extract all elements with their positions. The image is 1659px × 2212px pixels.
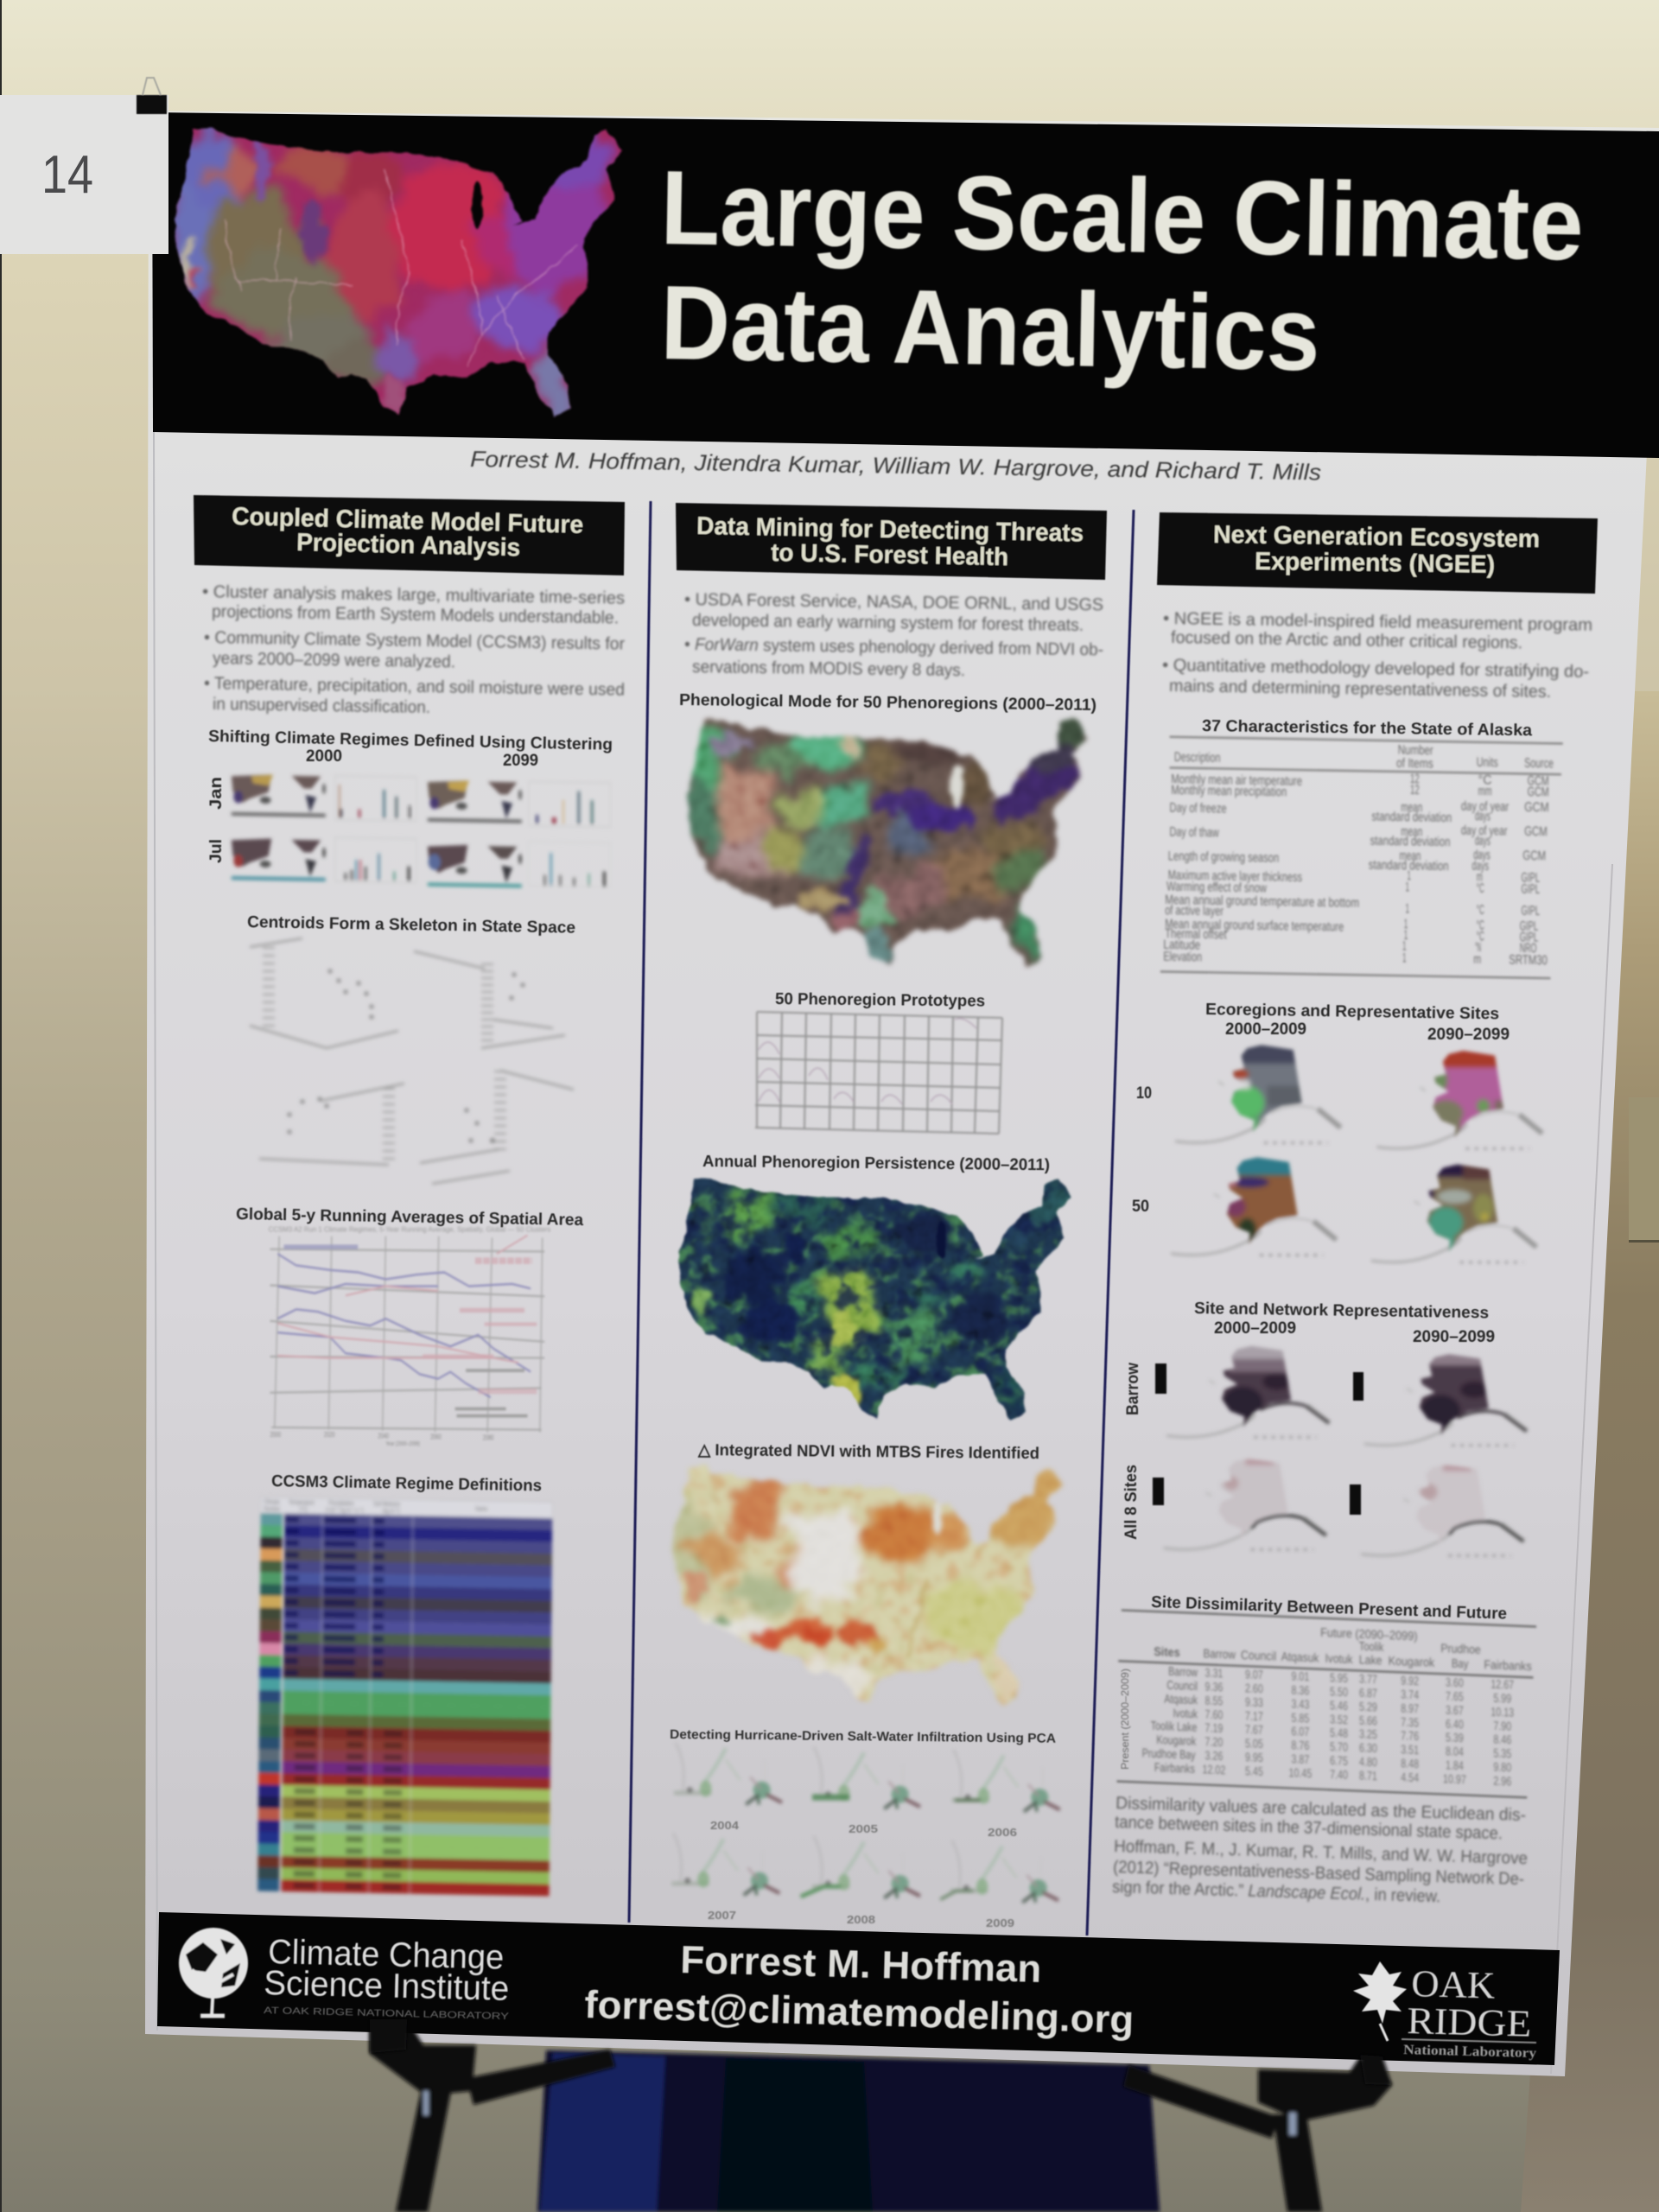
table alaska characteristics: day of year (1461, 823, 1508, 838)
table site dissimilarity: 4.80 (1359, 1755, 1377, 1770)
table alaska characteristics: NRO (1520, 940, 1536, 956)
line chart global running averages: 2000 (270, 1430, 281, 1440)
map phenological mode (679, 709, 1096, 974)
table alaska characteristics: m (1473, 951, 1481, 966)
number card: 14 (41, 145, 93, 205)
table alaska characteristics: 1 (1404, 927, 1408, 942)
bullets column 3: • Quantitative methodology developed for stratifying do- (1162, 656, 1589, 682)
table alaska characteristics: 1 (1406, 900, 1409, 916)
table site dissimilarity: 3.25 (1359, 1727, 1377, 1742)
table site dissimilarity: Council (1241, 1649, 1276, 1663)
notes and citation: (2012) “Representativeness-Based Sampling Network De- (1113, 1858, 1524, 1889)
salt-water infiltration panels: 2008 (847, 1913, 875, 1926)
heading integrated NDVI: △ Integrated NDVI with MTBS Fires Identified (697, 1441, 1039, 1463)
table site dissimilarity: 5.05 (1245, 1737, 1263, 1751)
table alaska characteristics: °C (1478, 772, 1492, 787)
table alaska characteristics: standard deviation (1369, 857, 1449, 874)
table site dissimilarity: 5.29 (1359, 1700, 1377, 1714)
notes and citation: sign for the Arctic.” Landscape Ecol., in review. (1112, 1878, 1440, 1906)
logo: climate change science institute (179, 1928, 510, 2022)
map phenoregion persistence (671, 1170, 1079, 1427)
table alaska characteristics: m (1477, 869, 1483, 884)
shifting climate regimes figure: Jan (207, 777, 226, 810)
ecoregions alaska maps: 2090–2099 (1427, 1026, 1510, 1044)
table site dissimilarity: Bay (1452, 1656, 1469, 1671)
table site dissimilarity: 8.48 (1401, 1757, 1419, 1771)
table alaska characteristics: GIPL (1522, 903, 1540, 918)
prototypes grid (755, 990, 1002, 1134)
table site dissimilarity: Fairbanks (1154, 1761, 1195, 1776)
site and network representativeness (1122, 1300, 1527, 1555)
table site dissimilarity: Kougarok (1389, 1654, 1435, 1669)
bullets column 1: • Cluster analysis makes large, multivariate time-series (202, 582, 625, 608)
table site dissimilarity: 9.01 (1291, 1669, 1309, 1684)
table site dissimilarity: 6.40 (1446, 1717, 1464, 1732)
table alaska characteristics: Number (1398, 742, 1433, 758)
table alaska characteristics: SRTM30 (1509, 952, 1548, 968)
table alaska characteristics: of Items (1396, 755, 1433, 771)
table site dissimilarity: 7.40 (1330, 1768, 1348, 1782)
heading phenological mode: Phenological Mode for 50 Phenoregions (2000–2011) (679, 691, 1096, 715)
title: Large Scale Climate (660, 149, 1585, 283)
table site dissimilarity: 8.46 (1493, 1732, 1511, 1747)
table alaska characteristics: of active layer (1165, 902, 1224, 918)
stand clips over footer (370, 2019, 1392, 2085)
table site dissimilarity: Ivotuk (1325, 1651, 1353, 1667)
table site dissimilarity: Present (2000–2009) (1119, 1669, 1131, 1770)
salt-water infiltration panels: 2006 (988, 1826, 1017, 1839)
table site dissimilarity: 9.07 (1245, 1668, 1263, 1682)
table ccsm3 regime definitions: (°C) (299, 1505, 308, 1514)
table alaska characteristics: days (1471, 858, 1489, 873)
table site dissimilarity: 7.90 (1493, 1719, 1511, 1733)
table site dissimilarity: 6.75 (1330, 1754, 1348, 1768)
logo: climate change science institute: AT OAK RIDGE NATIONAL LABORATORY (264, 2005, 510, 2022)
table site dissimilarity: 6.30 (1359, 1741, 1377, 1756)
column divider lines (629, 501, 1134, 1936)
table alaska characteristics: Thermal offset (1165, 925, 1227, 942)
table site dissimilarity: Ivotuk (1173, 1707, 1198, 1721)
table site dissimilarity: 5.35 (1493, 1746, 1511, 1761)
line chart global running averages: 2040 (378, 1431, 389, 1440)
table alaska characteristics: Elevation (1163, 949, 1202, 964)
table site dissimilarity: Toolik Lake (1151, 1719, 1197, 1734)
table site dissimilarity: 9.95 (1245, 1751, 1263, 1764)
table alaska characteristics: °C (1477, 880, 1484, 895)
bullets column 2: developed an early warning system for forest threats. (692, 611, 1084, 635)
table site dissimilarity: Future (2090–2099) (1320, 1625, 1418, 1643)
notes and citation: Dissimilarity values are calculated as the Euclidean dis- (1116, 1794, 1526, 1825)
bullets column 1 (202, 582, 626, 717)
table ccsm3 regime definitions: Precipitation (328, 1500, 354, 1508)
table alaska characteristics: Length of growing season (1168, 849, 1279, 865)
table alaska characteristics: GCM (1524, 799, 1549, 815)
table site dissimilarity: 3.77 (1359, 1672, 1377, 1687)
table site dissimilarity: 6.07 (1291, 1725, 1309, 1738)
table alaska characteristics: Day of freeze (1170, 800, 1227, 816)
table alaska characteristics: Maximum active layer thickness (1168, 868, 1302, 885)
poster easel stand (370, 2019, 1392, 2212)
heading box 1 (194, 495, 625, 575)
bullets column 2: • ForWarn system uses phenology derived from NDVI ob- (684, 635, 1103, 659)
table alaska characteristics: °C (1477, 918, 1484, 932)
table site dissimilarity: 7.20 (1205, 1735, 1223, 1749)
table alaska characteristics: Units (1477, 754, 1498, 770)
table site dissimilarity: 7.65 (1446, 1689, 1464, 1704)
table site dissimilarity: Prudhoe Bay (1142, 1746, 1196, 1762)
table alaska characteristics: °C (1477, 928, 1484, 944)
title (660, 149, 1585, 392)
table site dissimilarity: 1.84 (1446, 1758, 1464, 1773)
table site dissimilarity: 8.97 (1401, 1701, 1419, 1716)
site and network representativeness: Barrow (1124, 1363, 1142, 1415)
heading box 3 (1157, 512, 1598, 594)
table alaska characteristics: mean (1401, 799, 1422, 815)
logo: climate change science institute: Science Institute (264, 1964, 510, 2008)
bullets column 2: servations from MODIS every 8 days. (692, 658, 965, 680)
table site dissimilarity: Kougarok (1156, 1733, 1197, 1748)
table site dissimilarity: 3.67 (1446, 1703, 1464, 1718)
notes and citation: Hoffman, F. M., J. Kumar, R. T. Mills, and W. W. Hargrove (1114, 1837, 1528, 1868)
table site dissimilarity: 12.02 (1203, 1763, 1225, 1777)
bullets column 1: • Temperature, precipitation, and soil moisture were used (204, 674, 625, 700)
table alaska characteristics: GCM (1528, 772, 1549, 788)
heading box 1: Projection Analysis (296, 529, 521, 562)
panel: data mining forest health (664, 503, 1107, 1929)
table site dissimilarity: 7.76 (1401, 1729, 1419, 1743)
site and network representativeness: Site and Network Representativeness (1194, 1300, 1489, 1322)
map integrated NDVI (664, 1459, 1071, 1713)
ecoregions alaska maps: 2000–2009 (1225, 1020, 1306, 1039)
table site dissimilarity: 5.46 (1330, 1699, 1348, 1713)
table site dissimilarity: 3.31 (1205, 1666, 1223, 1681)
logo: climate change science institute: Climate Change (268, 1933, 505, 1977)
table site dissimilarity: Fairbanks (1484, 1658, 1532, 1674)
table alaska characteristics: GCM (1528, 784, 1549, 799)
table site dissimilarity: 7.35 (1401, 1715, 1419, 1730)
table alaska characteristics: Monthly mean precipitation (1171, 782, 1287, 799)
table site dissimilarity: 8.71 (1359, 1769, 1377, 1783)
table site dissimilarity: 5.50 (1330, 1685, 1348, 1699)
logo: oak ridge national laboratory: RIDGE (1407, 1999, 1532, 2045)
table site dissimilarity: Prudhoe (1440, 1642, 1481, 1656)
table site dissimilarity: 9.92 (1401, 1674, 1419, 1688)
table alaska characteristics: mm (1478, 783, 1492, 798)
table site dissimilarity: 6.87 (1359, 1686, 1377, 1700)
table site dissimilarity: 5.39 (1446, 1731, 1464, 1745)
bullets column 3 (1162, 609, 1592, 702)
bullets column 1: years 2000–2099 were analyzed. (213, 649, 455, 671)
salt-water infiltration panels: Detecting Hurricane-Driven Salt-Water Infiltration Using PCA (670, 1727, 1056, 1746)
table site dissimilarity: Council (1166, 1678, 1198, 1694)
blue cloth under poster (537, 2050, 1160, 2212)
table site dissimilarity: 8.04 (1446, 1745, 1464, 1759)
table site dissimilarity: 12.67 (1491, 1677, 1514, 1692)
bullets column 3: • NGEE is a model-inspired field measurement program (1163, 609, 1592, 635)
logo: oak ridge national laboratory (1353, 1961, 1536, 2061)
table alaska characteristics: GIPL (1520, 918, 1538, 933)
table alaska characteristics: GCM (1522, 848, 1546, 863)
table alaska characteristics: GIPL (1522, 881, 1540, 896)
table alaska characteristics: °C (1477, 902, 1484, 917)
table alaska characteristics: days (1475, 808, 1491, 823)
panel: NGEE (1112, 512, 1598, 1906)
table alaska characteristics: 37 Characteristics for the State of Alaska (1202, 717, 1533, 740)
table ccsm3 regime definitions: CCSM3 Climate Regime Definitions (271, 1472, 542, 1495)
table site dissimilarity: 5.85 (1291, 1711, 1309, 1726)
salt-water infiltration panels: 2009 (986, 1916, 1014, 1929)
header map of US clusters (166, 119, 631, 426)
table site dissimilarity: Sites (1154, 1645, 1180, 1660)
table alaska characteristics: Mean annual ground surface temperature (1165, 916, 1344, 934)
table site dissimilarity: 9.36 (1205, 1680, 1223, 1694)
bullets column 1: in unsupervised classification. (213, 695, 430, 717)
table alaska characteristics: °N (1475, 939, 1481, 955)
table site dissimilarity: 10.45 (1289, 1766, 1312, 1781)
table site dissimilarity: 8.76 (1291, 1738, 1309, 1752)
table alaska characteristics: mean (1401, 823, 1422, 839)
table site dissimilarity: 9.80 (1493, 1760, 1511, 1775)
table site dissimilarity: Atqasuk (1164, 1692, 1198, 1707)
logo: oak ridge national laboratory: OAK (1411, 1962, 1496, 2007)
ecoregions alaska maps (1132, 1001, 1542, 1262)
table ccsm3 regime definitions: Temperature (289, 1499, 315, 1507)
bullets column 1: projections from Earth System Models understandable. (212, 602, 619, 627)
title: Data Analytics (660, 264, 1321, 392)
table alaska characteristics: Warming effect of snow (1166, 879, 1267, 895)
table site dissimilarity: 3.87 (1291, 1752, 1309, 1766)
table site dissimilarity: 10.13 (1491, 1705, 1514, 1719)
table site dissimilarity: Lake (1359, 1653, 1382, 1668)
line chart global running averages (236, 1205, 584, 1447)
bullets column 3: mains and determining representativeness of sites. (1169, 677, 1551, 702)
notes and citation: tance between sites in the 37-dimensional state space. (1115, 1813, 1503, 1843)
table alaska characteristics (1160, 717, 1563, 978)
table alaska characteristics: 12 (1410, 782, 1420, 797)
contact name and email: forrest@climatemodeling.org (584, 1982, 1135, 2042)
table alaska characteristics: days (1475, 833, 1491, 848)
table site dissimilarity: 8.55 (1205, 1694, 1223, 1708)
logo: oak ridge national laboratory: National Laboratory (1403, 2043, 1536, 2061)
table site dissimilarity: 3.74 (1401, 1688, 1419, 1702)
table site dissimilarity: 7.60 (1205, 1707, 1223, 1722)
site and network representativeness: 2000–2009 (1214, 1319, 1296, 1338)
notes and citation (1112, 1794, 1528, 1906)
table site dissimilarity: 4.54 (1401, 1770, 1419, 1785)
table site dissimilarity: 3.51 (1401, 1743, 1419, 1757)
table alaska characteristics: standard deviation (1370, 833, 1450, 849)
ecoregions alaska maps: Ecoregions and Representative Sites (1205, 1001, 1499, 1023)
centroids figure (247, 913, 575, 1184)
shifting climate regimes figure: Jul (207, 839, 226, 863)
table site dissimilarity: 2.96 (1493, 1774, 1511, 1789)
prototypes grid: 50 Phenoregion Prototypes (775, 990, 985, 1011)
shifting climate regimes figure: 2000 (306, 747, 342, 766)
table ccsm3 regime definitions: (×10⁻⁵ kg m⁻² s⁻¹) (326, 1507, 364, 1515)
contact name and email (584, 1937, 1135, 2042)
header band (152, 112, 1659, 458)
bullets column 2 (684, 590, 1103, 680)
table alaska characteristics: 1 (1407, 868, 1411, 883)
site and network representativeness: All 8 Sites (1122, 1465, 1141, 1540)
table site dissimilarity: 7.19 (1205, 1721, 1223, 1735)
bullets column 2: • USDA Forest Service, NASA, DOE ORNL, and USGS (684, 590, 1103, 614)
heading box 3: Next Generation Ecosystem (1213, 521, 1540, 553)
salt-water infiltration panels: 2007 (708, 1909, 736, 1922)
binder clip (137, 78, 167, 114)
table site dissimilarity: 2.60 (1245, 1681, 1263, 1696)
table site dissimilarity: Barrow (1203, 1647, 1236, 1662)
table alaska characteristics: 12 (1410, 771, 1420, 786)
table site dissimilarity: 5.45 (1245, 1764, 1263, 1778)
heading box 1: Coupled Climate Model Future (232, 503, 583, 539)
table alaska characteristics: Latitude (1163, 937, 1200, 952)
table ccsm3 regime definitions: Climate (264, 1499, 280, 1506)
table site dissimilarity: 3.26 (1205, 1749, 1223, 1764)
table site dissimilarity: 5.95 (1330, 1671, 1348, 1685)
table site dissimilarity: 3.43 (1291, 1697, 1309, 1712)
shifting climate regimes figure: 2099 (503, 752, 538, 770)
heading box 2: Data Mining for Detecting Threats (696, 512, 1084, 548)
table alaska characteristics: GIPL (1520, 929, 1538, 944)
table alaska characteristics: Monthly mean air temperature (1171, 771, 1302, 788)
table alaska characteristics: 1 (1402, 938, 1406, 953)
line chart global running averages: 2020 (324, 1430, 335, 1440)
shifting climate regimes figure (207, 728, 613, 889)
table site dissimilarity: 10.97 (1443, 1772, 1466, 1787)
table alaska characteristics: Description (1174, 749, 1220, 765)
table site dissimilarity: 5.66 (1359, 1713, 1377, 1728)
centroids figure: Centroids Form a Skeleton in State Space (247, 913, 575, 938)
heading box 2: to U.S. Forest Health (771, 539, 1008, 571)
table ccsm3 regime definitions: Soil Moisture (373, 1501, 400, 1509)
shifting climate regimes figure: Shifting Climate Regimes Defined Using Clustering (208, 728, 613, 754)
line chart global running averages: 2060 (430, 1432, 442, 1441)
table site dissimilarity (1116, 1593, 1536, 1798)
line chart global running averages: Year (2000–2099) (385, 1440, 420, 1447)
table site dissimilarity: 5.99 (1493, 1691, 1511, 1706)
salt-water infiltration panels: 2005 (849, 1822, 878, 1835)
table alaska characteristics: Source (1524, 755, 1554, 771)
bullets column 3: focused on the Arctic and other critical regions. (1171, 628, 1522, 652)
table site dissimilarity: 5.70 (1330, 1740, 1348, 1754)
table ccsm3 regime definitions: Name (475, 1506, 487, 1513)
bullets column 1: • Community Climate System Model (CCSM3) results for (204, 628, 626, 654)
ecoregions alaska maps: 50 (1132, 1198, 1149, 1216)
panel: coupled climate model (194, 495, 626, 1897)
line chart global running averages: 2080 (483, 1433, 493, 1442)
heading box 2 (676, 503, 1107, 580)
table ccsm3 regime definitions (257, 1472, 552, 1897)
line chart global running averages: Global 5-y Running Averages of Spatial Area (236, 1205, 584, 1230)
line chart global running averages: CCSM3 A2 Run 1 Climate Regimes, 5-Year Running Average, Spatially, Global — 50 Clusters (269, 1224, 551, 1234)
table alaska characteristics: 1 (1404, 916, 1408, 931)
table ccsm3 regime definitions: Number (264, 1506, 281, 1513)
table site dissimilarity: 3.60 (1446, 1675, 1464, 1690)
table alaska characteristics: Mean annual ground temperature at bottom (1165, 892, 1359, 910)
table site dissimilarity: Toolik (1359, 1639, 1384, 1654)
table alaska characteristics: day of year (1461, 798, 1510, 814)
table site dissimilarity: 8.36 (1291, 1683, 1309, 1698)
table site dissimilarity: Atqasuk (1281, 1649, 1319, 1665)
table site dissimilarity: 7.17 (1245, 1709, 1263, 1724)
number card (0, 95, 168, 254)
table site dissimilarity: 3.52 (1330, 1713, 1348, 1727)
table site dissimilarity: 5.48 (1330, 1726, 1348, 1740)
contact name and email: Forrest M. Hoffman (680, 1937, 1042, 1991)
ecoregions alaska maps: 10 (1136, 1084, 1152, 1103)
heading box 3: Experiments (NGEE) (1255, 548, 1495, 579)
table alaska characteristics: GCM (1524, 823, 1548, 839)
table ccsm3 regime definitions: (kg m⁻²) (383, 1508, 400, 1516)
table alaska characteristics: standard deviation (1371, 809, 1452, 825)
table alaska characteristics: 1 (1406, 879, 1409, 894)
table site dissimilarity: Barrow (1168, 1664, 1198, 1680)
heading persistence: Annual Phenoregion Persistence (2000–2011) (702, 1153, 1050, 1174)
salt-water infiltration panels (670, 1727, 1060, 1929)
table site dissimilarity: Site Dissimilarity Between Present and Future (1151, 1593, 1507, 1624)
table site dissimilarity: 7.67 (1245, 1723, 1263, 1737)
table site dissimilarity: 9.33 (1245, 1695, 1263, 1710)
table alaska characteristics: GIPL (1522, 869, 1540, 885)
table alaska characteristics: Day of thaw (1170, 824, 1219, 840)
table alaska characteristics: days (1473, 847, 1491, 862)
salt-water infiltration panels: 2004 (710, 1819, 740, 1832)
site and network representativeness: 2090–2099 (1413, 1328, 1495, 1346)
table alaska characteristics: mean (1400, 848, 1421, 863)
footer band (157, 1912, 1560, 2065)
authors: Forrest M. Hoffman, Jitendra Kumar, William W. Hargrove, and Richard T. Mills (470, 446, 1321, 485)
table alaska characteristics: 1 (1402, 950, 1406, 965)
